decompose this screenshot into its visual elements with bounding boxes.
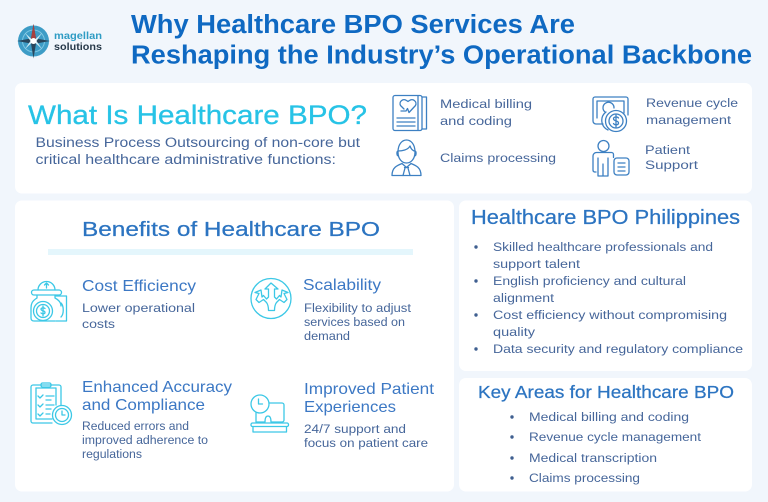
benefit: scalability: demand [304,329,350,343]
title: Reshaping the Industry’s Operational Backbone [131,42,752,70]
benefit: improved patient experiences: Improved Patient [304,381,435,398]
icon: claims processing person [392,140,421,176]
benefit: cost efficiency [82,278,196,331]
benefit: enhanced accuracy and compliance: improved adherence to [82,433,208,447]
benefit: improved patient experiences: 24/7 support and [304,422,406,436]
panel: healthcare BPO Philippines [459,200,752,371]
benefit: enhanced accuracy and compliance: Reduced errors and [82,419,189,433]
benefit: cost efficiency: Lower operational [82,301,195,315]
title [131,11,752,70]
benefit: cost efficiency: Cost Efficiency [82,278,196,295]
definition text: Business Process Outsourcing of non-core but [36,135,360,150]
heading: what is healthcare BPO: What Is Healthcare BPO? [28,100,367,130]
benefit: scalability: Scalability [303,277,381,294]
benefit: enhanced accuracy and compliance [82,379,232,461]
benefit: scalability: services based on [304,315,405,329]
benefit: scalability: Flexibility to adjust [304,301,412,315]
label: patient support: Support [645,158,699,172]
bullet list: key areas [510,410,702,485]
icon: cost efficiency jar [31,282,66,321]
bullet list: Philippines: support talent [493,257,581,271]
bullet list: Philippines: English proficiency and cultural [493,274,686,288]
icon: accuracy clipboard with clock [31,383,72,424]
benefit: scalability [303,277,412,343]
label: medical billing and coding: and coding [440,114,512,128]
bullet list: key areas: Medical transcription [529,451,657,465]
label: patient support: Patient [645,143,691,157]
heading: key areas: Key Areas for Healthcare BPO [478,382,734,402]
benefit: enhanced accuracy and compliance: and Compliance [82,397,205,414]
bullet list: Philippines: Skilled healthcare professionals and [493,240,713,254]
panel: benefits of healthcare BPO [15,200,454,492]
icon: medical billing document [393,96,426,130]
panel: key areas for healthcare BPO [459,378,752,492]
bullet list: key areas: Claims processing [529,471,640,485]
heading: benefits: Benefits of Healthcare BPO [82,219,380,241]
title: Why Healthcare BPO Services Are [131,11,575,39]
label: medical billing and coding: Medical billing [440,97,532,111]
bullet list: Philippines: quality [493,325,536,339]
logo: magellan solutions: magellan [54,30,102,42]
bullet list: key areas: Medical billing and coding [529,410,689,424]
heading: Philippines: Healthcare BPO Philippines [471,207,740,229]
icon: patient support figure with chart [593,140,629,176]
benefit: enhanced accuracy and compliance: regulations [82,447,142,461]
benefit: improved patient experiences: Experiences [304,399,396,416]
label: revenue cycle management: Revenue cycle [646,96,738,110]
bullet list: Philippines: Cost efficiency without compromising [493,308,727,322]
bullet list: key areas: Revenue cycle management [529,430,702,444]
definition text [36,135,360,167]
bullet list: Philippines: Data security and regulatory compliance [493,342,743,356]
logo: magellan solutions [17,24,102,58]
label: revenue cycle management: management [646,113,732,127]
icon: revenue cycle banknote and coin [593,97,628,132]
icon: scalability arrows [251,278,291,318]
icon: patient experience desk and clock [251,395,288,432]
label: claims processing: Claims processing [440,151,556,165]
definition text: critical healthcare administrative functions: [36,152,336,167]
panel: what is healthcare BPO [15,83,752,194]
bullet list: Philippines [474,240,743,356]
label: patient support [645,143,699,172]
logo: magellan solutions: solutions [54,41,102,53]
label: medical billing and coding [440,97,532,128]
label: revenue cycle management [646,96,738,127]
benefit: cost efficiency: costs [82,317,115,331]
benefit: improved patient experiences: focus on patient care [304,436,428,450]
benefit: enhanced accuracy and compliance: Enhanced Accuracy [82,379,232,396]
bullet list: Philippines: alignment [493,291,555,305]
benefit: improved patient experiences [304,381,435,450]
